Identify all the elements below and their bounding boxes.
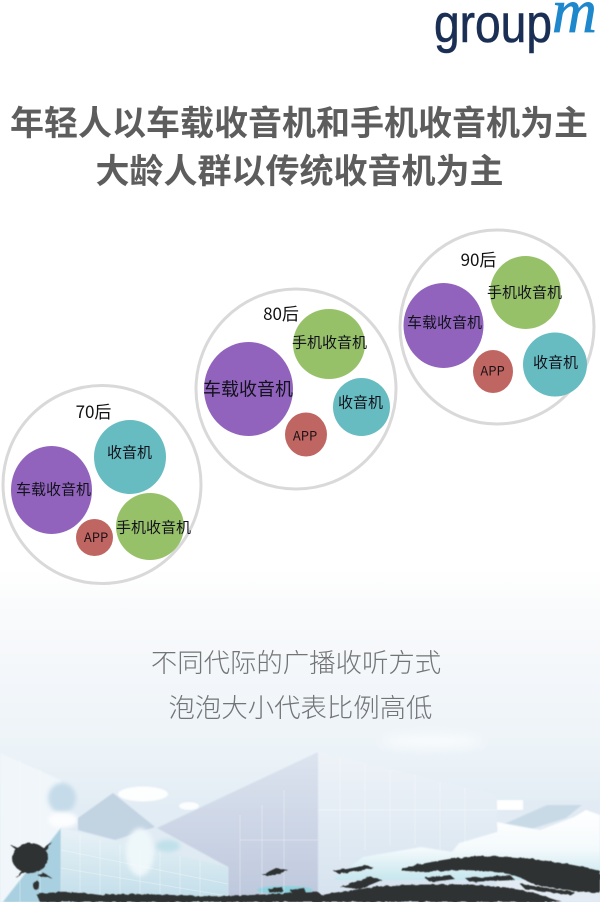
bubble: 收音机	[333, 378, 390, 436]
title	[10, 96, 588, 193]
bubble: 车载收音机	[404, 283, 484, 368]
panel: 70后 bubble group	[3, 386, 201, 584]
bubble: 手机收音机: 手机收音机	[487, 282, 562, 302]
bubble: APP: APP	[84, 527, 108, 546]
bubble: APP: APP	[293, 426, 317, 444]
bubble: 手机收音机	[116, 493, 191, 560]
caption text	[151, 641, 441, 725]
background: pale sky and cityscape	[0, 570, 600, 902]
caption text: 泡泡大小代表比例高低	[169, 686, 432, 725]
bubble: 车载收音机: 车载收音机	[203, 376, 293, 402]
bubble: APP: APP	[480, 360, 505, 380]
bubble: 车载收音机: 车载收音机	[16, 478, 91, 500]
bubble: APP	[473, 350, 513, 393]
bubble: 收音机: 收音机	[338, 392, 383, 412]
label: 80后: 80后	[263, 300, 299, 325]
bubble: 收音机: 收音机	[533, 352, 578, 372]
bubble: 手机收音机: 手机收音机	[116, 516, 191, 538]
caption text: 不同代际的广播收听方式	[151, 641, 441, 680]
panel: 80后 bubble group	[196, 289, 396, 489]
panel: 90后 bubble group	[400, 230, 594, 424]
bubble: 收音机	[523, 332, 587, 396]
bubble: 收音机: 收音机	[107, 442, 152, 462]
label: 70后: 70后	[76, 398, 111, 423]
bubble: 收音机	[94, 420, 166, 494]
bubble: APP	[76, 519, 113, 556]
label: 90后: 90后	[461, 246, 496, 271]
bubble: 车载收音机	[11, 446, 92, 534]
title: 年轻人以车载收音机和手机收音机为主	[10, 96, 588, 145]
bubble: 手机收音机	[487, 256, 562, 329]
bubble: 手机收音机	[292, 309, 367, 379]
bubble: APP	[285, 412, 327, 456]
bubble: 车载收音机: 车载收音机	[407, 312, 482, 332]
bubble: 手机收音机: 手机收音机	[292, 332, 367, 352]
bubble: 车载收音机	[203, 342, 293, 436]
title: 大龄人群以传统收音机为主	[96, 144, 504, 193]
ink brush decoration	[10, 842, 600, 902]
